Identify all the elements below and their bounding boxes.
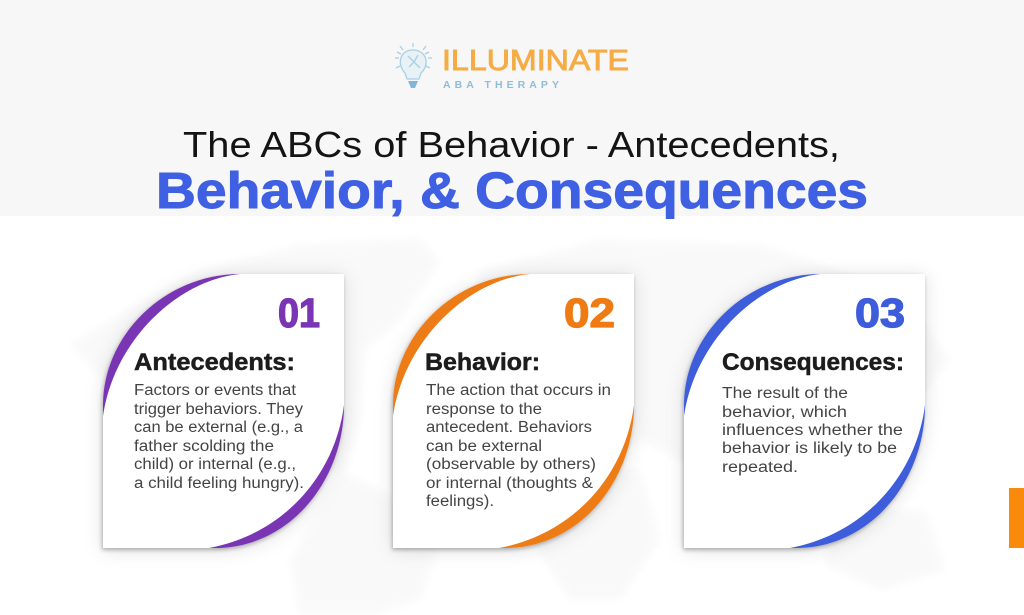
number 03: 03 [855, 290, 905, 336]
text block antecedents: father scolding the [134, 438, 274, 455]
heading antecedents: Antecedents: [134, 349, 295, 376]
heading consequences: Consequences: [722, 349, 904, 376]
logo wordmark: ILLUMINATE [442, 45, 629, 77]
text block antecedents: Factors or events that [134, 382, 297, 399]
text block antecedents [134, 382, 304, 492]
text block antecedents: trigger behaviors. They [134, 401, 303, 418]
logo [395, 43, 629, 91]
heading behavior: Behavior: [425, 349, 540, 376]
text block behavior [426, 382, 611, 510]
card shape orange [393, 274, 634, 548]
text block behavior: The action that occurs in [426, 382, 611, 399]
text block behavior: response to the [426, 401, 542, 418]
title line 1: The ABCs of Behavior - Antecedents, [183, 124, 840, 165]
text block consequences: behavior is likely to be [722, 440, 897, 457]
text block antecedents: child) or internal (e.g., [134, 456, 296, 473]
text block consequences: influences whether the [722, 422, 903, 439]
card shape purple [103, 274, 344, 548]
number 02: 02 [564, 290, 615, 336]
title line 2: Behavior, & Consequences [156, 162, 868, 219]
panel: behavior [393, 274, 634, 548]
text block consequences: repeated. [722, 459, 798, 476]
text block consequences: The result of the [722, 385, 848, 402]
text block antecedents: can be external (e.g., a [134, 419, 303, 436]
text block behavior: or internal (thoughts & [426, 475, 594, 492]
orange accent tab [1009, 488, 1024, 548]
text block behavior: (observable by others) [426, 456, 596, 473]
logo tagline: ABA THERAPY [443, 79, 559, 91]
number 01: 01 [278, 290, 320, 336]
panel: antecedents [103, 274, 344, 548]
icon: light bulb [395, 43, 432, 88]
card shape blue [684, 274, 925, 548]
text block consequences: behavior, which [722, 404, 847, 421]
text block behavior: can be external [426, 438, 542, 455]
text block behavior: feelings). [426, 493, 494, 510]
text block behavior: antecedent. Behaviors [426, 419, 592, 436]
faint world map [70, 238, 950, 615]
text block antecedents: a child feeling hungry). [134, 475, 304, 492]
panel: consequences [684, 274, 925, 548]
header band [0, 0, 1024, 216]
text block consequences [722, 385, 903, 476]
